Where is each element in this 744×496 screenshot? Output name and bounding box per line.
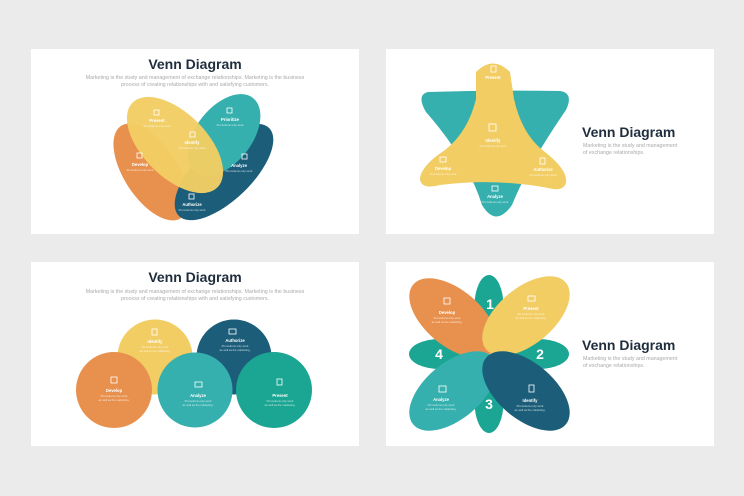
subtitle 4: [583, 356, 678, 369]
petal: teal: [395, 336, 511, 446]
labels slide 1: Promotions only work: [179, 146, 206, 150]
labels slide 2: Promotions only work: [530, 173, 557, 177]
circle: navy: [196, 320, 272, 394]
numbers: [435, 296, 544, 412]
labels slide 3: [99, 329, 296, 407]
subtitle: Marketing is the study and management of exchange relationships. Marketing is the business: [86, 75, 305, 81]
labels slide 3: Promotions only work: [222, 344, 249, 348]
labels slide 4: Identify: [523, 398, 538, 403]
panel: slide 1: [31, 49, 359, 236]
labels slide 3: as well as the marketing.: [265, 403, 296, 407]
circle: orange: [76, 352, 152, 428]
subtitle 4: Marketing is the study and management: [583, 356, 678, 362]
labels slide 2: Analyze: [487, 194, 504, 199]
labels slide 1: Prioritize: [221, 117, 240, 122]
labels slide 4: Promotions only work: [428, 403, 455, 407]
labels slide 3: Promotions only work: [142, 345, 169, 349]
panel: slide 3: [31, 262, 359, 446]
labels slide 4: Promotions only work: [517, 404, 544, 408]
shape: teal triangle: [421, 91, 569, 216]
labels slide 1: Promotions only work: [226, 169, 253, 173]
circle: green: [236, 352, 312, 428]
labels slide 3: as well as the marketing.: [183, 403, 214, 407]
numbers: 1: [486, 296, 494, 312]
labels slide 4: Promotions only work: [518, 312, 545, 316]
ellipse: orange: [98, 111, 204, 233]
labels slide 3: Authorize: [225, 338, 245, 343]
ellipse: teal: [173, 81, 275, 189]
subtitle 2: of exchange relationships.: [583, 150, 645, 156]
labels slide 4: as well as the marketing.: [516, 316, 547, 320]
circle: yellow: [118, 320, 192, 394]
subtitle 2: Marketing is the study and management: [583, 143, 678, 149]
subtitle 4: of exchange relationships.: [583, 363, 645, 369]
labels slide 2: Present: [485, 75, 501, 80]
labels slide 4: Present: [523, 306, 539, 311]
subtitle 3: [86, 289, 305, 302]
labels slide 3: as well as the marketing.: [220, 348, 251, 352]
labels slide 2: [430, 66, 557, 204]
title 3: Venn Diagram: [148, 269, 242, 285]
title: Venn Diagram: [148, 56, 242, 72]
subtitle: [86, 75, 305, 88]
labels slide 1: Promotions only work: [127, 168, 154, 172]
shape: yellow triangle: [420, 64, 566, 189]
labels slide 3: Promotions only work: [185, 399, 212, 403]
petal: orange: [395, 263, 511, 373]
labels slide 3: Promotions only work: [101, 394, 128, 398]
labels slide 3: Identify: [148, 339, 163, 344]
numbers: 4: [435, 346, 443, 362]
labels slide 4: as well as the marketing.: [432, 320, 463, 324]
labels slide 2: Promotions only work: [430, 172, 457, 176]
title 2: Venn Diagram: [582, 124, 675, 140]
panel: slide 4: [386, 261, 714, 446]
labels slide 1: Promotions only work: [179, 208, 206, 212]
labels slide 1: Present: [149, 118, 165, 123]
circle: teal: [158, 352, 232, 428]
labels slide 3: Analyze: [190, 393, 207, 398]
labels slide 1: Analyze: [231, 163, 248, 168]
labels slide 1: [127, 108, 253, 212]
panel: slide 2: [386, 49, 714, 234]
labels slide 3: Present: [272, 393, 288, 398]
labels slide 4: as well as the marketing.: [426, 407, 457, 411]
labels slide 1: Promotions only work: [217, 123, 244, 127]
labels slide 2: Identify: [486, 138, 501, 143]
labels slide 1: Develop: [132, 162, 149, 167]
labels slide 2: Promotions only work: [480, 144, 507, 148]
labels slide 1: Promotions only work: [144, 124, 171, 128]
labels slide 4: as well as the marketing.: [515, 408, 546, 412]
petal: navy: [468, 336, 584, 446]
labels slide 2: Promotions only work: [482, 200, 509, 204]
labels slide 4: Analyze: [433, 397, 450, 402]
labels slide 3: as well as the marketing.: [99, 398, 130, 402]
subtitle 2: [583, 143, 678, 156]
labels slide 1: Identify: [185, 140, 200, 145]
labels slide 4: [426, 296, 547, 412]
labels slide 3: Promotions only work: [267, 399, 294, 403]
labels slide 3: as well as the marketing.: [140, 349, 171, 353]
subtitle 3: Marketing is the study and management of exchange relationships. Marketing is the business: [86, 289, 305, 295]
numbers: 2: [536, 346, 544, 362]
labels slide 4: Develop: [439, 310, 456, 315]
labels slide 4: Promotions only work: [434, 316, 461, 320]
labels slide 3: Develop: [106, 388, 123, 393]
petal: yellow: [468, 261, 584, 371]
labels slide 2: Develop: [435, 166, 452, 171]
subtitle 3: process of creating relationships with and satisfying customers.: [121, 296, 269, 302]
subtitle: process of creating relationships with and satisfying customers.: [121, 82, 269, 88]
labels slide 2: Authorize: [533, 167, 553, 172]
ellipse: navy: [159, 108, 289, 236]
small petals green: [409, 275, 569, 433]
numbers: 3: [485, 396, 493, 412]
title 4: Venn Diagram: [582, 337, 675, 353]
ellipse: yellow: [110, 80, 240, 210]
labels slide 1: Authorize: [182, 202, 202, 207]
